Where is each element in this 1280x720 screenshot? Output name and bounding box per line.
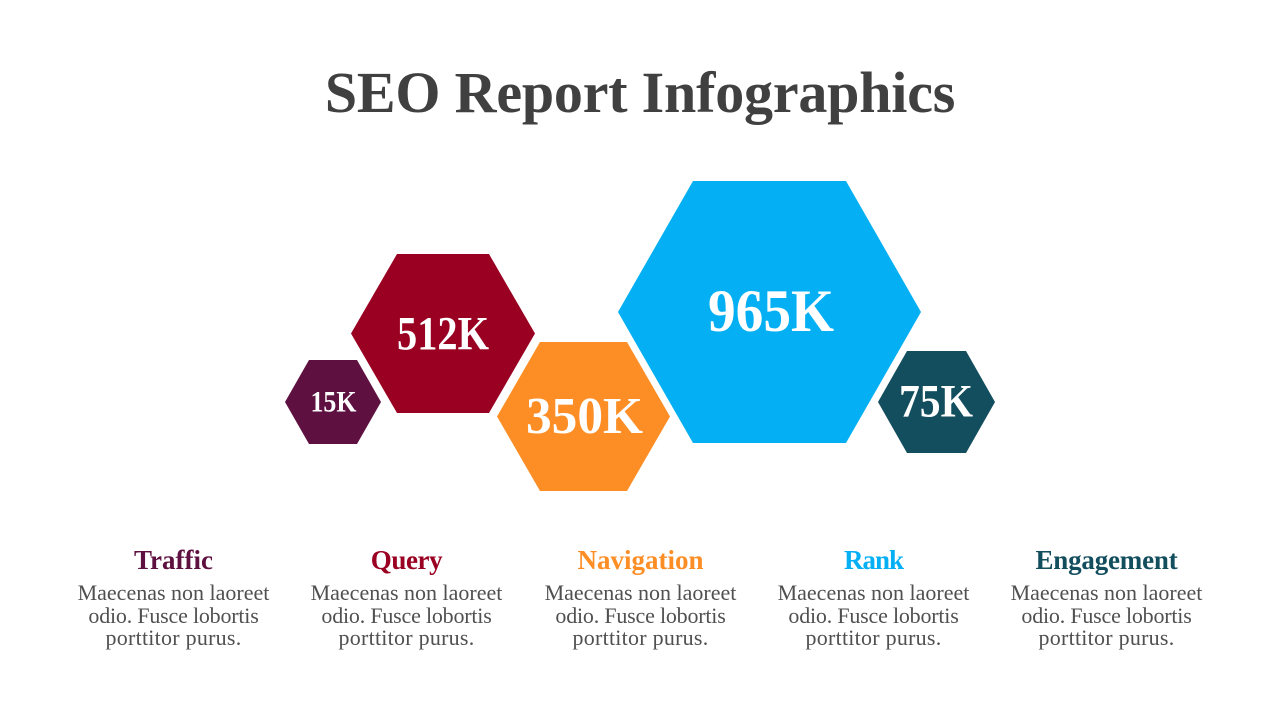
column: Query (311, 545, 502, 650)
heading: Query: Query (371, 545, 442, 575)
title: SEO Report Infographics (325, 60, 955, 125)
heading: Engagement: Engagement (1036, 545, 1178, 575)
heading: Rank: Rank (844, 545, 903, 575)
hexagon: 512K query (351, 254, 535, 413)
hexagon: 350K navigation (497, 342, 670, 491)
hexagon: 15K traffic: 15K (310, 386, 357, 418)
text: Engagement description: porttitor purus. (1038, 625, 1174, 650)
text: Query description: odio. Fusce lobortis (321, 603, 492, 628)
hexagon: 15K traffic (285, 360, 381, 444)
text: Engagement description (1011, 580, 1202, 650)
text: Rank description: porttitor purus. (806, 625, 942, 650)
text: Engagement description: Maecenas non laoreet (1011, 580, 1202, 605)
hexagon: 75K engagement: 75K (899, 376, 973, 428)
text: Traffic description: odio. Fusce lobortis (88, 603, 259, 628)
text: Query description: porttitor purus. (338, 625, 474, 650)
column: Rank (778, 545, 970, 650)
text: Query description (311, 580, 502, 650)
text: Navigation description: Maecenas non laoreet (545, 580, 736, 605)
column: Engagement (1011, 545, 1202, 650)
text: Navigation description: odio. Fusce lobortis (555, 603, 726, 628)
text: Traffic description (78, 580, 270, 650)
hexagon: 965K rank (618, 181, 921, 443)
text: Navigation description (545, 580, 736, 650)
heading: Navigation: Navigation (577, 545, 704, 575)
text: Navigation description: porttitor purus. (572, 625, 708, 650)
hexagon: 350K navigation: 350K (526, 388, 644, 445)
hexagon: 75K engagement (878, 351, 995, 453)
text: Rank description (778, 580, 970, 650)
column: Traffic (78, 545, 270, 650)
column: Navigation (545, 545, 736, 650)
hexagon: 965K rank: 965K (708, 278, 834, 344)
text: Engagement description: odio. Fusce lobortis (1021, 603, 1192, 628)
text: Rank description: odio. Fusce lobortis (788, 603, 959, 628)
text: Query description: Maecenas non laoreet (311, 580, 502, 605)
text: Traffic description: Maecenas non laoreet (78, 580, 269, 605)
hexagon: 512K query: 512K (397, 308, 489, 360)
heading: Traffic: Traffic (134, 545, 213, 575)
text: Rank description: Maecenas non laoreet (778, 580, 969, 605)
text: Traffic description: porttitor purus. (106, 625, 242, 650)
